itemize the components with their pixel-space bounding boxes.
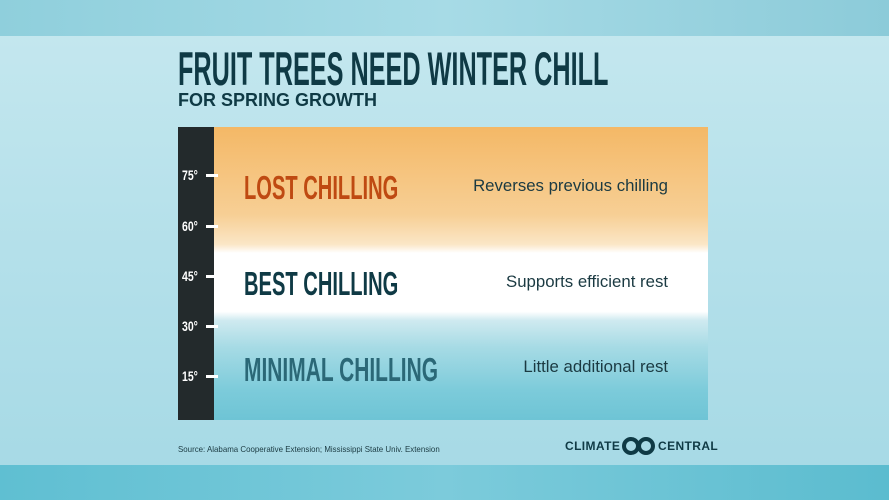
- tick 60: 60°: [182, 218, 198, 234]
- desc: minimal: Little additional rest: [523, 357, 668, 376]
- desc: best: Supports efficient rest: [506, 272, 668, 291]
- scale bar: [178, 127, 214, 420]
- desc: lost: Reverses previous chilling: [473, 176, 668, 195]
- label: minimal chilling: MINIMAL CHILLING: [244, 351, 438, 388]
- tick 15: 15°: [182, 368, 198, 384]
- tick 30: 30°: [182, 318, 198, 334]
- tick 15: [182, 368, 218, 384]
- logo: climate central: [565, 437, 718, 455]
- source: Source: Alabama Cooperative Extension; Mississippi State Univ. Extension: [178, 444, 440, 454]
- tick 45: [182, 268, 214, 284]
- logo: climate central: CLIMATE: [565, 439, 620, 453]
- tick 60: [182, 218, 218, 234]
- tick 75: [182, 167, 218, 183]
- logo: climate central: CENTRAL: [658, 439, 718, 453]
- icon: logo rings: [622, 437, 655, 455]
- panel: chart: [178, 127, 708, 420]
- title: FRUIT TREES NEED WINTER CHILL: [178, 42, 608, 95]
- tick 30: [182, 318, 218, 334]
- label: best chilling: BEST CHILLING: [244, 265, 398, 302]
- tick 45: 45°: [182, 268, 198, 284]
- label: lost chilling: LOST CHILLING: [244, 169, 398, 206]
- tick 75: 75°: [182, 167, 198, 183]
- subtitle: FOR SPRING GROWTH: [178, 90, 377, 110]
